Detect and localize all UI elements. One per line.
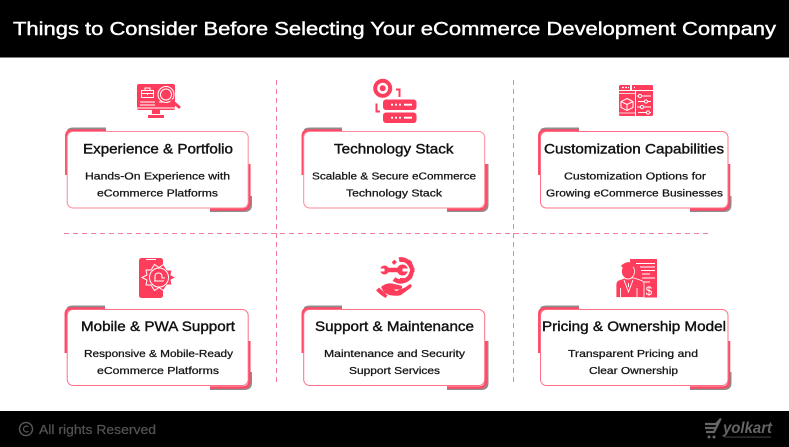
description: Support Services	[349, 365, 440, 377]
icon: person with price document	[616, 259, 657, 298]
description	[312, 170, 476, 200]
description	[324, 348, 466, 377]
icon: phone with gear	[139, 258, 176, 298]
heading: Mobile & PWA Support	[81, 318, 235, 334]
footer bar	[0, 411, 789, 447]
header bar	[0, 0, 789, 58]
description: Growing eCommerce Businesses	[546, 188, 723, 200]
icon: wrench, gear and hand	[376, 258, 414, 298]
logo: yolkart	[705, 418, 773, 438]
heading: Technology Stack	[334, 140, 455, 156]
description: Responsive & Mobile-Ready	[84, 348, 234, 360]
panel: Experience & Portfolio	[66, 128, 251, 211]
panel: Support & Maintenance	[303, 306, 488, 389]
description: Customization Options for	[564, 170, 707, 182]
heading: Support & Maintenance	[315, 318, 474, 334]
description: Clear Ownership	[589, 365, 678, 377]
description: eCommerce Platforms	[97, 188, 218, 200]
description	[568, 348, 698, 377]
icon: product customization window	[619, 85, 653, 116]
panel: Mobile & PWA Support	[66, 306, 251, 389]
panel: Customization Capabilities	[539, 128, 730, 211]
heading: Pricing & Ownership Model	[542, 318, 726, 334]
description: Maintenance and Security	[324, 348, 466, 360]
description	[85, 170, 230, 200]
description: Hands-On Experience with	[85, 170, 230, 182]
panel: Pricing & Ownership Model	[539, 306, 730, 389]
description	[84, 348, 234, 377]
panel: Technology Stack	[303, 128, 488, 211]
icon: copyright	[20, 422, 32, 436]
description	[546, 170, 723, 200]
logo: yolkart: yolkart	[722, 420, 773, 437]
icon: target and server stack	[375, 81, 416, 123]
description: eCommerce Platforms	[97, 365, 219, 377]
copyright text: All rights Reserved	[39, 422, 156, 437]
description: Transparent Pricing and	[568, 348, 698, 360]
description: Scalable & Secure eCommerce	[312, 170, 476, 182]
title: Things to Consider Before Selecting Your eCommerce Development Company	[13, 19, 776, 39]
icon: person with price document: $	[646, 286, 653, 298]
heading: Experience & Portfolio	[83, 140, 233, 156]
icon: monitor with briefcase and magnifier	[137, 84, 179, 118]
description: Technology Stack	[346, 188, 443, 200]
heading: Customization Capabilities	[544, 140, 724, 156]
